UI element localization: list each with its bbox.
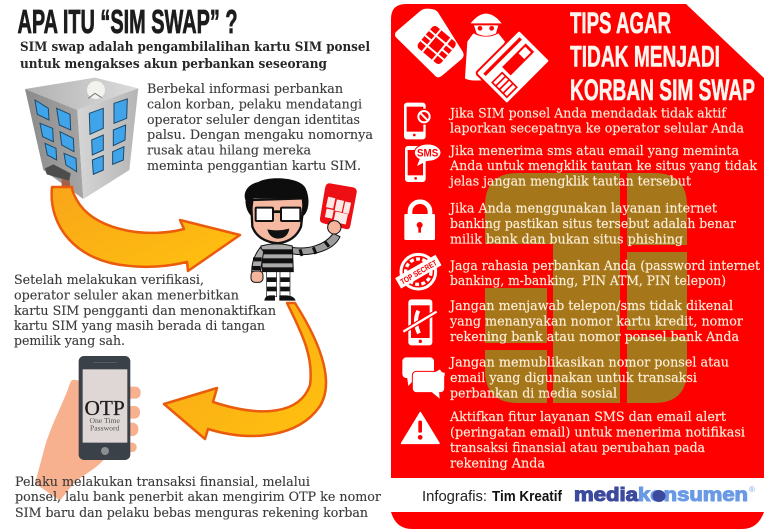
paragraph: step 2 xyxy=(14,273,276,349)
watermark: SIM chip xyxy=(485,173,687,403)
paragraph: step 1 xyxy=(147,82,373,174)
credit: infografis xyxy=(422,488,563,505)
paragraph: step 1: meminta penggantian kartu SIM. xyxy=(147,159,361,174)
icon: warning triangle xyxy=(402,413,439,443)
tip 6: Jangan memublikasikan nomor ponsel atau xyxy=(448,356,729,371)
tip 3 xyxy=(404,202,737,248)
icon: chat bubbles xyxy=(402,357,445,399)
logo: mediakonsumen: media xyxy=(574,485,638,506)
icon: padlock xyxy=(404,202,435,240)
heading: tips: TIPS AGAR xyxy=(570,7,671,40)
tip 1: Jika SIM ponsel Anda mendadak tidak aktif xyxy=(448,106,727,122)
paragraph: step 2: kartu SIM yang masih berada di tangan xyxy=(14,319,265,334)
tip 3: Jika Anda menggunakan layanan internet xyxy=(448,202,718,217)
paragraph: step 1: palsu. Dengan mengaku nomornya xyxy=(147,128,373,143)
OTP label: Password xyxy=(90,423,120,432)
OTP label: One Time xyxy=(89,416,120,425)
icon: hand holding OTP phone xyxy=(35,356,141,501)
icon: red SIM card xyxy=(320,183,357,229)
icon: phone call crossed out xyxy=(403,299,437,345)
logo: mediakonsumen: konsumen xyxy=(638,485,748,506)
tip 2 xyxy=(405,144,758,190)
tip 6: perbankan di media sosial xyxy=(450,387,617,402)
tip 7: Aktifkan fitur layanan SMS dan email alert xyxy=(449,410,727,425)
paragraph: step 1: calon korban, pelaku mendatangi xyxy=(147,98,362,112)
tip 4: banking, m-banking, PIN ATM, PIN telepon) xyxy=(450,274,726,289)
paragraph: step 1: operator seluler dengan identitas xyxy=(147,113,360,128)
paragraph: step 2: Setelah melakukan verifikasi, xyxy=(14,273,204,288)
credit: infografis: Tim Kreatif xyxy=(492,488,563,505)
subtitle xyxy=(20,39,370,72)
arrow: building to thief xyxy=(52,187,240,271)
tip 1 xyxy=(404,103,744,139)
OTP label xyxy=(85,396,125,432)
paragraph: step 2: operator seluler akan menerbitkan xyxy=(14,288,239,304)
icon: SMS phone xyxy=(405,144,441,182)
OTP label: OTP xyxy=(85,396,125,420)
tip 3: banking pastikan situs tersebut adalah benar xyxy=(450,217,737,232)
icon: thief holding SIM xyxy=(245,178,357,301)
icon: phone blocked xyxy=(404,103,432,139)
tip 7 xyxy=(402,410,745,472)
credit: infografis: Infografis: xyxy=(422,488,487,505)
icon: SIM, thief and card xyxy=(395,9,550,104)
tip 3: milik bank dan bukan situs phishing xyxy=(450,232,683,248)
tip 2: Jika menerima sms atau email yang meminta xyxy=(448,144,739,159)
tip 1: laporkan secepatnya ke operator selular Anda xyxy=(450,122,744,136)
tip 6 xyxy=(402,356,729,402)
subtitle: untuk mengakses akun perbankan seseorang xyxy=(20,56,328,72)
tip 5: Jangan menjawab telepon/sms tidak dikenal xyxy=(448,299,733,314)
paragraph: step 2: kartu SIM pengganti dan menonaktifkan xyxy=(14,304,276,319)
paragraph: step 3: Pelaku melakukan transaksi finansial, melalui xyxy=(15,475,310,490)
logo: mediakonsumen: ® xyxy=(749,485,755,494)
title: APA ITU “SIM SWAP” ? xyxy=(18,3,238,40)
subtitle: SIM swap adalah pengambilalihan kartu SIM ponsel xyxy=(20,39,370,55)
paragraph: step 3: SIM baru dan pelaku bebas menguras rekening korban xyxy=(15,506,368,521)
tip 6: email yang digunakan untuk transaksi xyxy=(450,371,697,386)
tip 7: transaksi finansial atau perubahan pada xyxy=(450,441,705,456)
icon: SMS phone: SMS xyxy=(417,147,438,159)
logo: mediakonsumen xyxy=(574,485,755,506)
icon: top secret stamp: TOP SECRET xyxy=(399,258,439,286)
heading: tips xyxy=(570,7,755,107)
paragraph: step 2: pemilik yang sah. xyxy=(14,334,125,349)
tip 4 xyxy=(395,254,761,289)
panel: bottom red band xyxy=(391,512,764,529)
panel: tips xyxy=(391,4,764,478)
tip 7: (peringatan email) untuk menerima notifikasi xyxy=(450,426,745,441)
paragraph: step 3: ponsel, lalu bank penerbit akan mengirim OTP ke nomor xyxy=(15,490,382,505)
tip 5 xyxy=(403,299,744,345)
arrow: thief to phone xyxy=(164,303,326,439)
tip 2: Anda untuk mengklik tautan ke situs yang tidak xyxy=(449,159,758,174)
tip 7: rekening Anda xyxy=(450,457,545,472)
paragraph: step 3 xyxy=(15,475,382,521)
tip 5: rekening bank atau nomor ponsel bank Anda xyxy=(450,330,739,345)
tip 5: yang menanyakan nomor kartu kredit, nomor xyxy=(449,314,744,329)
tip 2: jelas jangan mengklik tautan tersebut xyxy=(448,174,692,190)
icon: building xyxy=(25,78,138,199)
paragraph: step 1: rusak atau hilang mereka xyxy=(147,144,311,158)
paragraph: step 1: Berbekal informasi perbankan xyxy=(147,82,343,97)
